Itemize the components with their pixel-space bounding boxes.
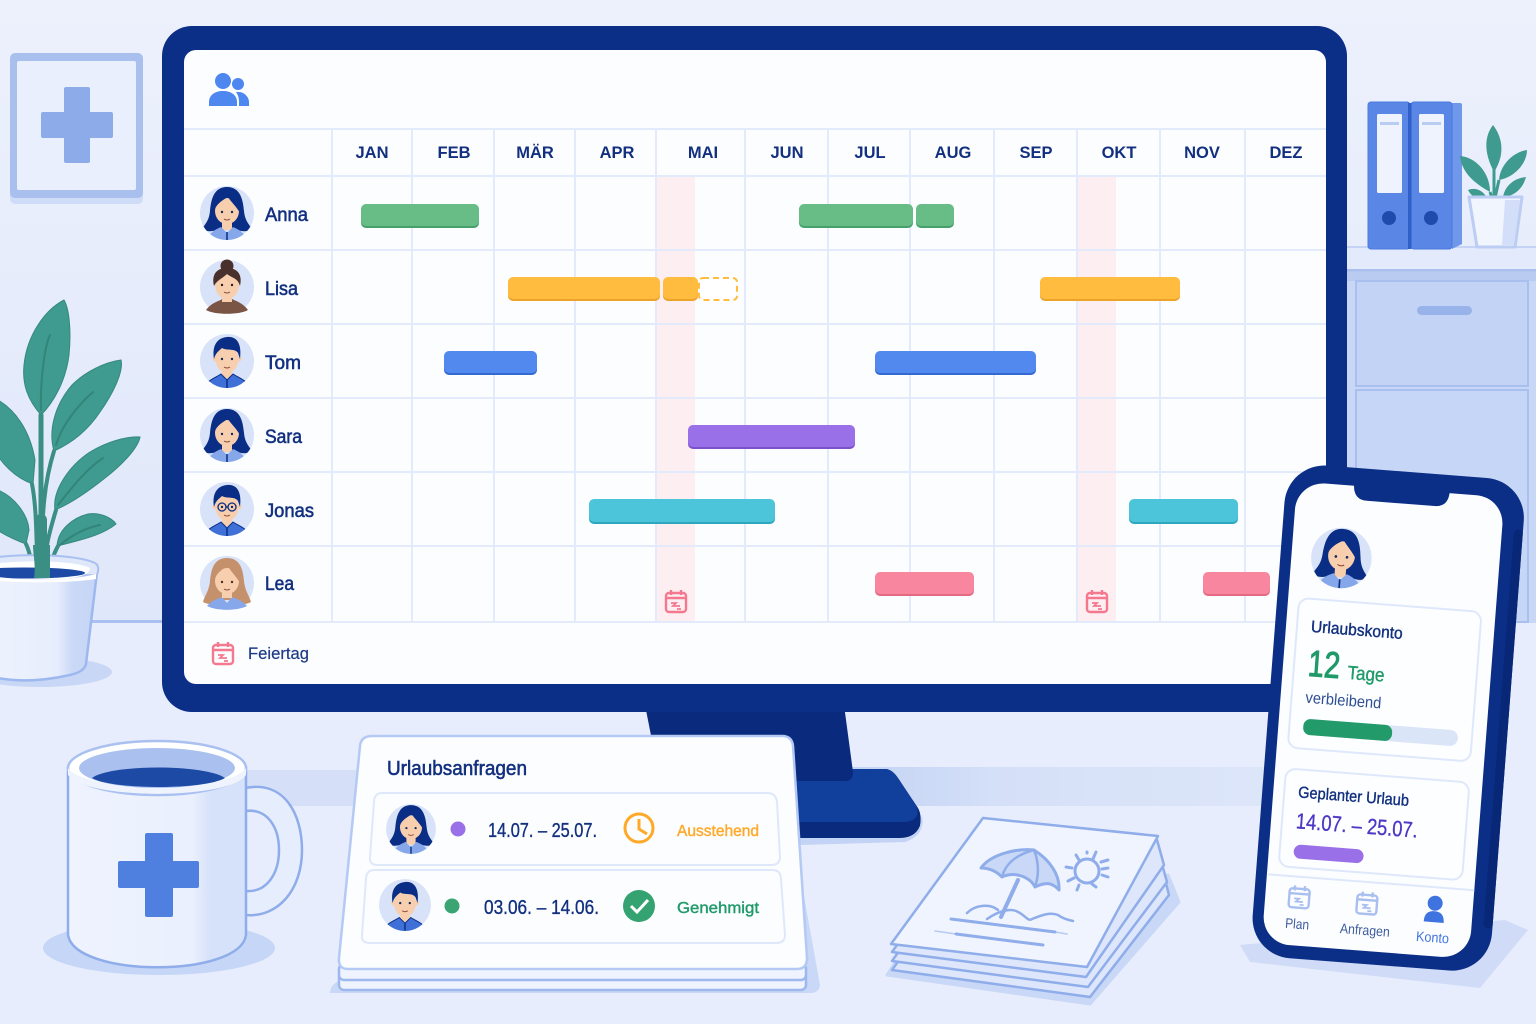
request row: approved: Genehmigt: [677, 900, 760, 917]
card: vacation balance: 12: [1307, 643, 1342, 686]
month header: [355, 144, 1302, 162]
employee: Tom: [200, 334, 301, 392]
tab: Plan: Plan: [1285, 915, 1310, 933]
coffee mug: [43, 741, 302, 975]
icons: holiday markers: [666, 590, 1107, 612]
employee: Lea: [200, 556, 294, 610]
month header: AUG: [935, 144, 971, 162]
card: vacation balance: [1288, 598, 1482, 761]
employee: Lea: Lea: [265, 574, 294, 595]
bars: Tom: [444, 351, 1036, 375]
vacation requests card: [330, 736, 820, 993]
month header: APR: [600, 144, 634, 162]
month header: DEZ: [1270, 144, 1302, 162]
month header: JAN: [355, 144, 389, 162]
employee: Sara: [200, 408, 302, 464]
tab: Konto: [1415, 894, 1452, 946]
card: vacation balance: Tage: [1347, 663, 1385, 687]
wall picture: medical cross: [10, 53, 143, 204]
month header: FEB: [438, 144, 471, 162]
icon: umbrella and sun: [935, 850, 1108, 945]
request row: pending: Ausstehend: [677, 823, 759, 840]
employee: Jonas: Jonas: [265, 501, 314, 522]
tab: Plan: [1285, 885, 1312, 933]
employee: Tom: Tom: [265, 353, 301, 374]
bars: Lea: [875, 572, 1270, 596]
shelf plant: [1460, 125, 1527, 247]
smartphone: [1240, 463, 1528, 988]
month header: MAI: [688, 144, 718, 162]
request row: pending: 14.07. – 25.07.: [488, 820, 597, 842]
vacation brochure: [887, 818, 1179, 1004]
employee: Anna: [200, 186, 308, 242]
leaves: [0, 300, 140, 546]
card: planned vacation: Geplanter Urlaub: [1298, 784, 1410, 810]
monitor: [162, 26, 1347, 712]
request row: approved: [362, 870, 785, 943]
bars: Lisa: [508, 277, 1180, 301]
request row: approved: 03.06. – 14.06.: [484, 897, 599, 919]
card: vacation balance: verbleibend: [1305, 690, 1382, 712]
legend: Feiertag: Feiertag: [248, 644, 309, 663]
bars: Jonas: [589, 499, 1238, 524]
employee: Jonas: [200, 482, 314, 540]
profile avatar: [1309, 526, 1374, 593]
card: planned vacation: 14.07. – 25.07.: [1295, 808, 1419, 843]
monitor stand: [645, 705, 923, 845]
desk shadow bands: [240, 767, 1280, 806]
month header: SEP: [1019, 144, 1053, 162]
card: planned vacation: [1279, 768, 1470, 880]
left plant: [0, 300, 140, 687]
card: vacation balance: Urlaubskonto: [1310, 618, 1403, 643]
pot: [0, 572, 97, 680]
heading: Urlaubsanfragen: [387, 758, 527, 780]
tab: Anfragen: Anfragen: [1339, 920, 1390, 940]
tab: Anfragen: [1339, 890, 1393, 940]
holiday bands: [657, 176, 1116, 622]
request row: pending: [370, 793, 780, 865]
month header: OKT: [1102, 144, 1136, 162]
month header: NOV: [1184, 144, 1220, 162]
bars: Sara: [688, 425, 855, 449]
month header: JUN: [770, 144, 804, 162]
cabinet: [1340, 246, 1536, 623]
employee: Lisa: Lisa: [265, 279, 298, 300]
employee: Lisa: [200, 260, 298, 314]
icon: team: [209, 73, 249, 106]
month header: MÄR: [516, 144, 554, 162]
employee: Anna: Anna: [265, 205, 308, 226]
bars: Anna: [361, 204, 954, 228]
gantt grid: [184, 129, 1326, 622]
tab: Konto: Konto: [1415, 928, 1450, 946]
employee: Sara: Sara: [265, 427, 302, 448]
binders: [1368, 102, 1462, 249]
legend: Feiertag: [213, 642, 309, 664]
wall line: [90, 620, 170, 623]
month header: JUL: [854, 144, 886, 162]
